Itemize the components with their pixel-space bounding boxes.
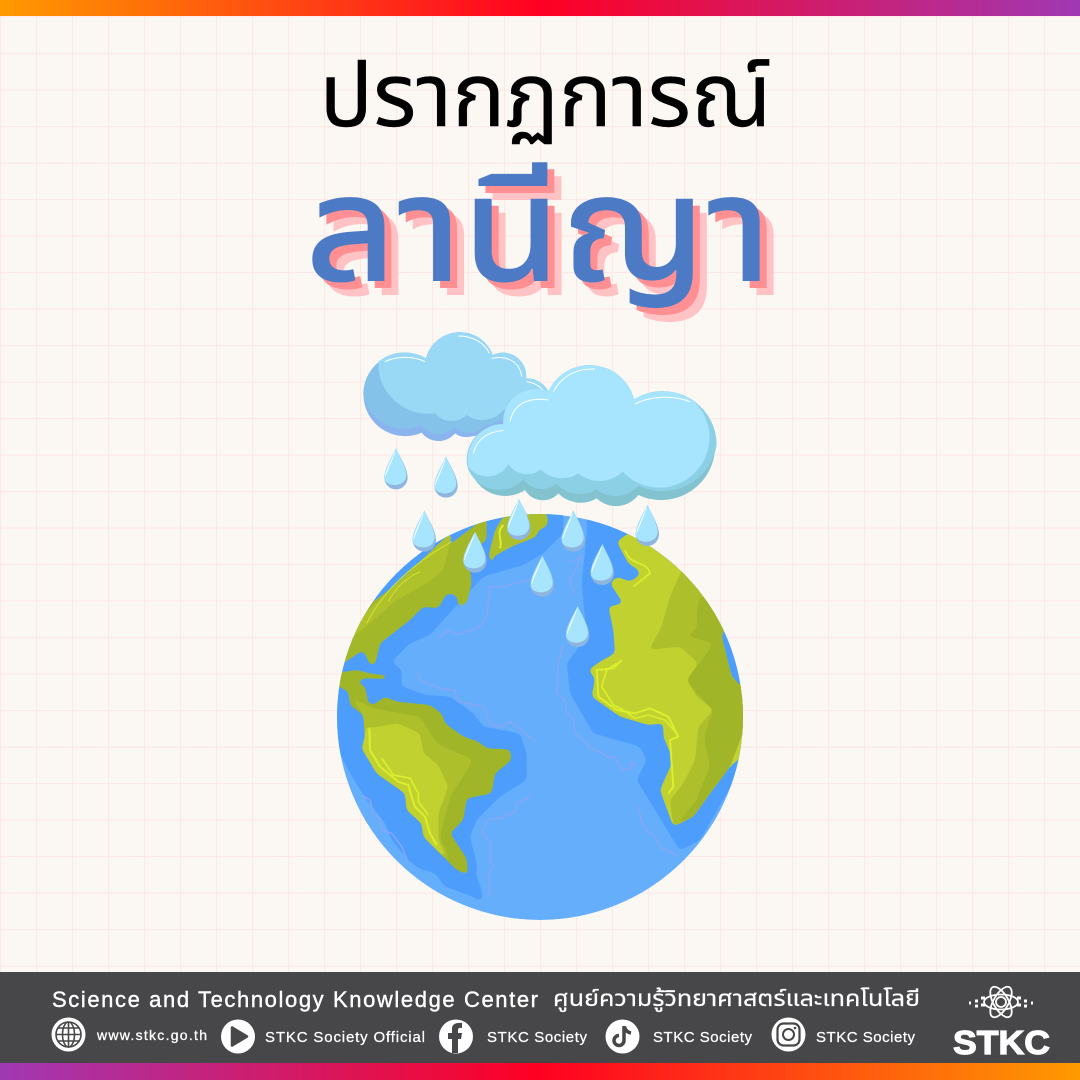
continental shelves [323,507,750,902]
bottom gradient bar [0,1063,1080,1080]
continent: Europe and Africa [588,530,750,827]
organisation name in English: Science and Technology Knowledge Center [52,987,538,1012]
continent: North and South America [327,517,512,875]
icon: website globe [52,1018,86,1052]
icon: facebook [439,1020,473,1054]
website label: www.stkc.go.th [96,1027,207,1043]
icon: play button [221,1020,255,1054]
footer band [0,972,1080,1063]
logo: STKC emblem [969,984,1033,1020]
ocean currents [362,557,677,897]
continent: Greenland [489,514,548,560]
TikTok label: STKC Society [653,1029,752,1046]
Facebook label: STKC Society [487,1029,588,1046]
icon: instagram [772,1018,806,1052]
title: La Niña with layered shadow: ลานีญา [319,159,786,327]
front cloud [467,365,717,506]
logo: STKC wordmark: STKC [953,1024,1050,1061]
globe [323,507,750,920]
organisation name in Thai: ศูนย์ความรู้วิทยาศาสตร์และเทคโนโลยี [553,986,920,1012]
title: first line: ปรากฏการณ์ [320,45,772,145]
raindrops [384,448,659,647]
YouTube label: STKC Society Official [265,1029,425,1046]
back cloud [363,332,550,441]
icon: tiktok [606,1020,640,1054]
top gradient bar [0,0,1080,16]
title: La Niña with layered shadow: ลานีญา [312,152,779,320]
title: La Niña with layered shadow: ลานีญา [305,145,772,313]
Instagram label: STKC Society [816,1029,916,1046]
ocean [337,514,743,920]
illustration: earth with rain clouds [323,332,750,920]
